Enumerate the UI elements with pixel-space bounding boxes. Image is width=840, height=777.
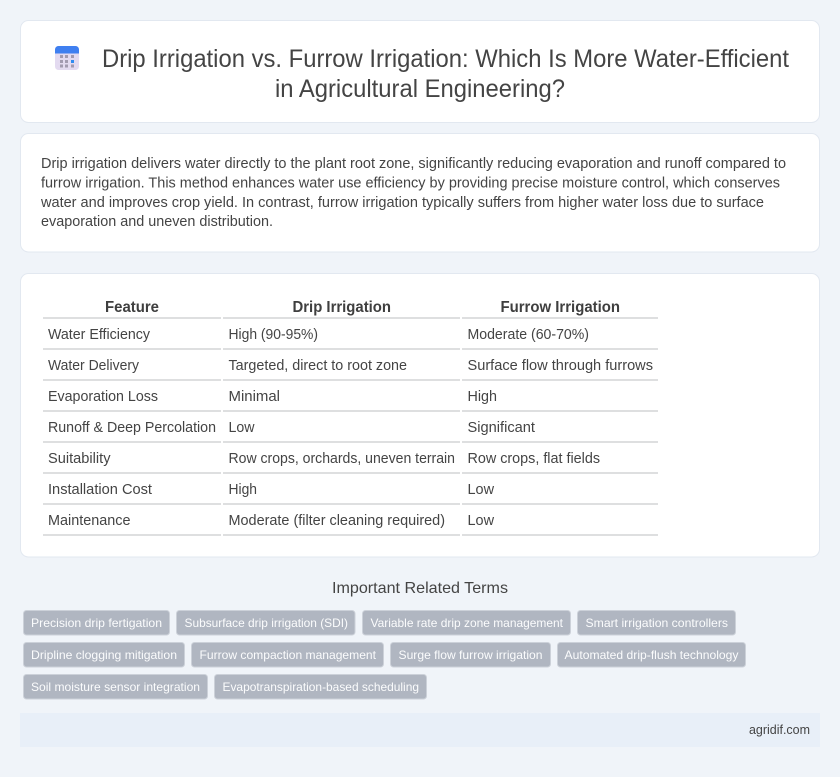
icon: calendar — [55, 46, 79, 70]
row: water delivery — [48, 358, 653, 374]
panel: title — [20, 20, 820, 122]
tag: Evapotranspiration-based scheduling — [222, 680, 419, 694]
table header: Drip Irrigation — [292, 299, 391, 316]
tag: Automated drip-flush technology — [564, 648, 738, 662]
row: water delivery: Surface flow through furrows — [468, 358, 653, 374]
row: water efficiency: Water Efficiency — [48, 327, 151, 343]
table header: Furrow Irrigation — [500, 299, 620, 316]
tag — [558, 642, 746, 667]
heading: title: Drip Irrigation vs. Furrow Irrigation: Which Is More Water-Efficient — [102, 45, 789, 73]
table header — [105, 299, 620, 316]
heading: title: in Agricultural Engineering? — [275, 75, 565, 103]
tag — [24, 610, 170, 635]
row: water efficiency: Moderate (60-70%) — [468, 327, 589, 343]
row: maintenance: Maintenance — [48, 513, 130, 529]
tag — [176, 610, 355, 635]
row: evaporation loss: Evaporation Loss — [48, 389, 158, 405]
tag: Furrow compaction management — [200, 648, 377, 662]
row: installation cost — [48, 482, 495, 498]
text block: description: evaporation and uneven distribution. — [41, 214, 273, 230]
tag: Precision drip fertigation — [31, 616, 162, 630]
text block: description: water and improves crop yield. In contrast, furrow irrigation typically suffers from higher water loss due to surface — [40, 195, 764, 211]
panel: description — [20, 134, 820, 252]
row: maintenance — [48, 513, 495, 529]
panel: comparison table — [20, 274, 820, 557]
text block: description — [40, 156, 786, 230]
table header: Feature — [105, 299, 159, 316]
row: installation cost: Low — [468, 482, 495, 498]
tag: Soil moisture sensor integration — [31, 680, 200, 694]
row: water efficiency: High (90-95%) — [228, 327, 318, 343]
row: suitability: Suitability — [48, 451, 111, 467]
tag — [214, 674, 426, 699]
tag — [192, 642, 384, 667]
tag: Variable rate drip zone management — [370, 616, 564, 630]
text block: description: furrow irrigation. This method enhances water use efficiency by providing precise moisture control, which conserves — [41, 176, 780, 192]
row: maintenance: Low — [468, 513, 495, 529]
row: runoff and deep percolation — [48, 420, 535, 436]
tag: Dripline clogging mitigation — [31, 648, 177, 662]
row: water efficiency — [48, 327, 589, 343]
tag — [390, 642, 550, 667]
heading: important related terms: Important Related Terms — [332, 580, 508, 597]
text block: description: Drip irrigation delivers water directly to the plant root zone, significantly reducing evaporation and runoff compared to — [41, 156, 786, 172]
row: water delivery: Targeted, direct to root zone — [228, 358, 407, 374]
heading: title — [102, 45, 789, 103]
tag: Smart irrigation controllers — [586, 616, 728, 630]
tags: related terms — [24, 610, 746, 699]
row: runoff and deep percolation: Significant — [468, 420, 535, 436]
row: water delivery: Water Delivery — [48, 358, 140, 374]
row: evaporation loss: Minimal — [228, 389, 280, 405]
footer: agridif.com — [749, 722, 810, 737]
row: installation cost: High — [228, 482, 257, 498]
footer — [20, 713, 820, 747]
row: runoff and deep percolation: Runoff & Deep Percolation — [48, 420, 216, 436]
row: suitability: Row crops, orchards, uneven terrain — [228, 451, 455, 467]
row: suitability — [48, 451, 600, 467]
row: runoff and deep percolation: Low — [228, 420, 255, 436]
row: evaporation loss: High — [468, 389, 497, 405]
row: evaporation loss — [48, 389, 497, 405]
tag — [24, 674, 208, 699]
row: installation cost: Installation Cost — [48, 482, 152, 498]
tag: Surge flow furrow irrigation — [398, 648, 542, 662]
tag — [24, 642, 184, 667]
row: maintenance: Moderate (filter cleaning required) — [228, 513, 445, 529]
tag — [578, 610, 736, 635]
row: suitability: Row crops, flat fields — [468, 451, 600, 467]
tag — [362, 610, 570, 635]
tag: Subsurface drip irrigation (SDI) — [184, 616, 348, 630]
